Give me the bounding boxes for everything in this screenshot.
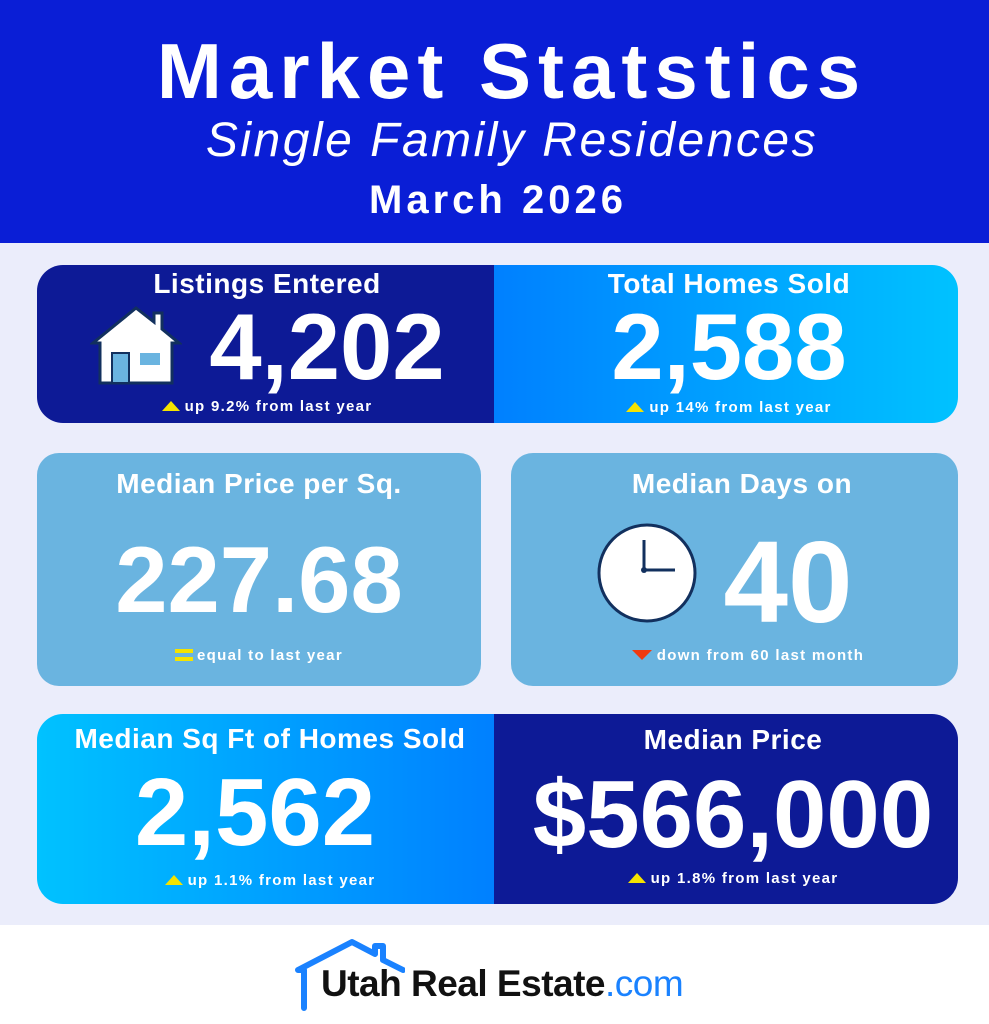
number: 2,588 <box>611 294 847 399</box>
subtitle: Single Family Residences <box>206 114 818 167</box>
panel: total homes sold <box>494 265 958 423</box>
change note: up 9.2% from last year <box>185 398 372 415</box>
icon: house <box>90 306 182 384</box>
panel: listings entered <box>37 265 495 423</box>
date: March 2026 <box>369 178 627 222</box>
heading: Median Days on <box>632 468 852 499</box>
panel: median days on market <box>511 453 958 686</box>
panel: median price <box>494 714 958 904</box>
number: 2,562 <box>135 759 375 866</box>
change note: down from 60 last month <box>657 647 864 664</box>
heading: Median Price per Sq. <box>116 468 402 499</box>
header <box>0 0 989 243</box>
change note: equal to last year <box>197 647 343 664</box>
panel: median sq ft <box>37 714 495 904</box>
change note: up 1.8% from last year <box>651 870 838 887</box>
icon: house outline <box>295 939 405 1011</box>
icon: clock <box>598 524 696 622</box>
change note: up 14% from last year <box>649 399 832 416</box>
logo <box>295 939 683 1011</box>
panel: median price per sq <box>37 453 481 686</box>
number: $566,000 <box>533 761 933 868</box>
number: 227.68 <box>115 527 403 632</box>
title: Market Statstics <box>157 27 867 115</box>
number: 40 <box>723 517 853 647</box>
heading: Median Price <box>644 724 822 755</box>
change note: up 1.1% from last year <box>188 872 375 889</box>
heading: Listings Entered <box>153 268 381 299</box>
number: 4,202 <box>209 294 445 399</box>
brand text: Utah Real Estate.com <box>321 963 683 1004</box>
stats background <box>0 243 989 925</box>
heading: Total Homes Sold <box>608 268 850 299</box>
heading: Median Sq Ft of Homes Sold <box>74 723 466 754</box>
